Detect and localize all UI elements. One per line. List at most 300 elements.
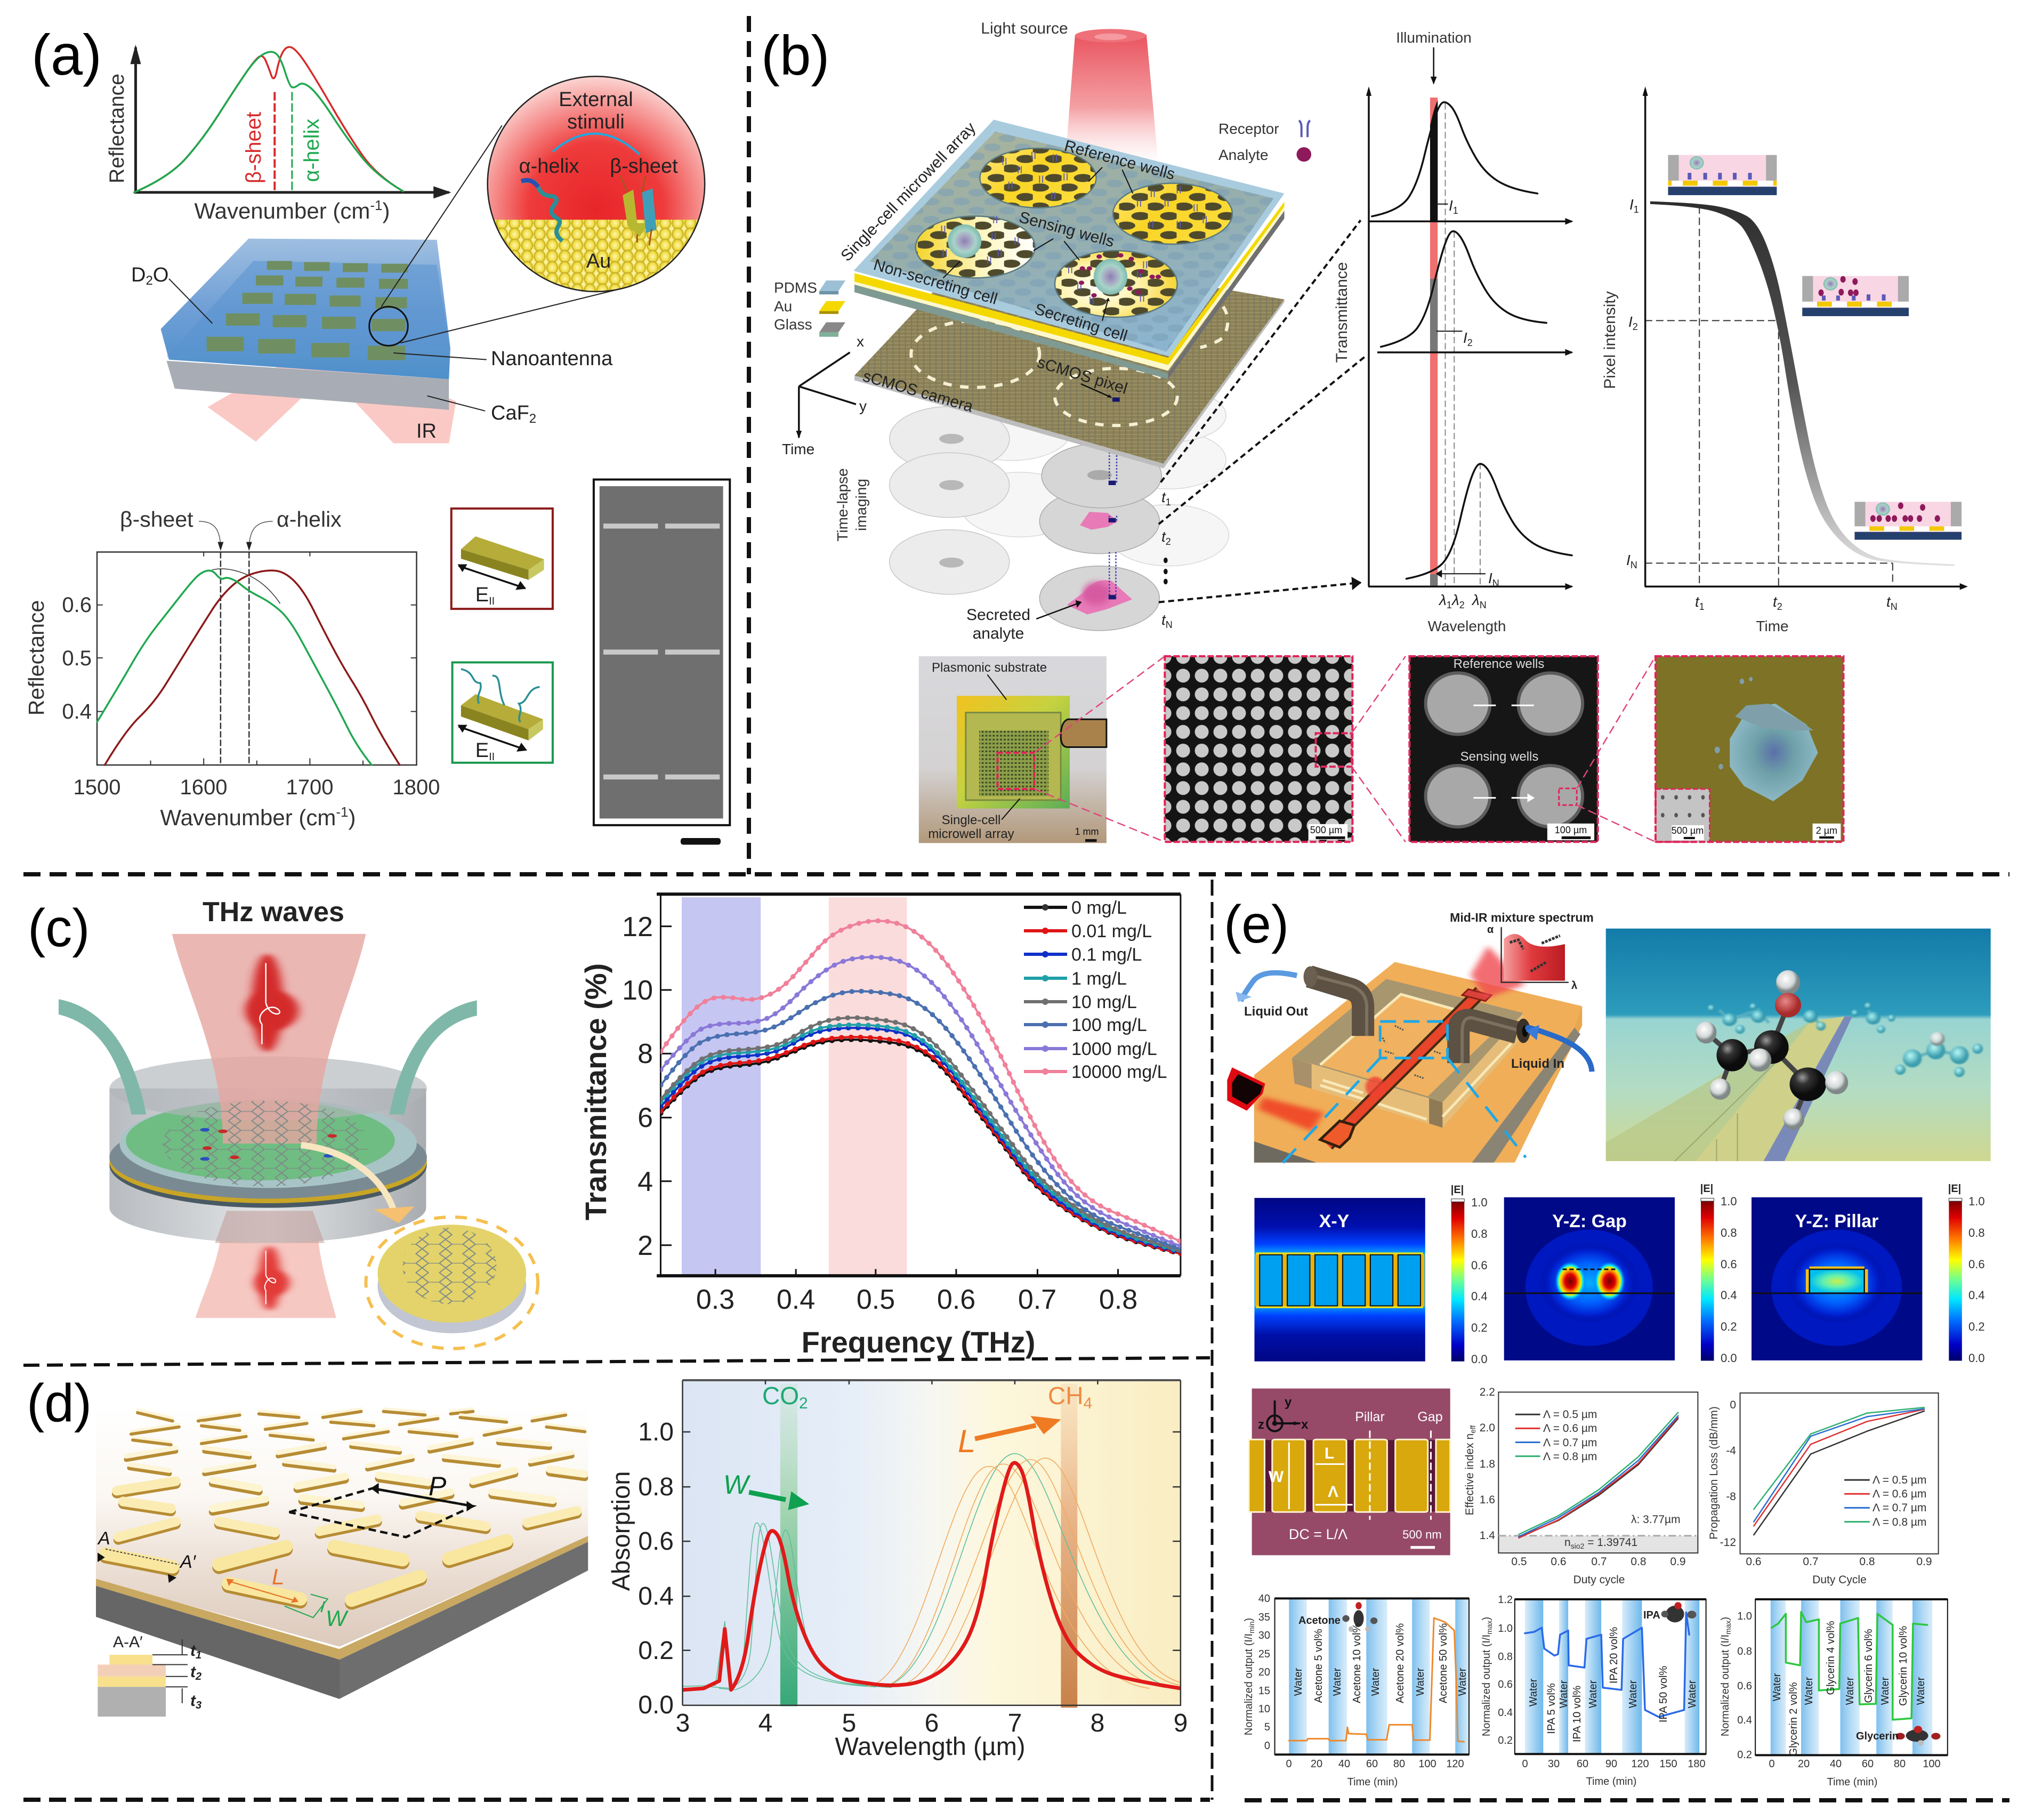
panel letter a: (a)	[31, 22, 102, 87]
micrograph: reference and sensing wells: 100 µm	[1555, 825, 1587, 835]
diagram: microwell array plate: Sensing wells	[1017, 208, 1116, 251]
panel: (b) single-cell plasmonic microwell imaging	[761, 20, 1968, 843]
chart: absorption spectrum	[607, 1380, 1188, 1760]
chart: glycerin response: Glycerin	[1856, 1730, 1899, 1742]
chart: acetone response: min	[1247, 1621, 1256, 1633]
chart: effective index vs duty cycle: 2.2	[1480, 1386, 1495, 1398]
chart: pixel intensity over time	[1601, 86, 1968, 634]
chart: pixel intensity over time: N	[1631, 560, 1637, 570]
icon: nanoantenna device on CaF2: Nanoantenna	[491, 348, 613, 370]
chart: glycerin response: 80	[1894, 1758, 1906, 1770]
diagram: time-lapse disks: N	[1166, 619, 1173, 630]
chart: measured reflectance: α-helix	[277, 507, 342, 531]
panel: (e) mid-IR waveguide sensor	[1224, 895, 1991, 1788]
chart: absorption spectrum: W	[723, 1470, 751, 1500]
chart: pixel intensity over time: 2	[1777, 601, 1782, 612]
legend: concentration series: 0.1 mg/L	[1071, 945, 1142, 965]
chart: effective index vs duty cycle: n	[1564, 1536, 1571, 1549]
chart: absorption spectrum: CH	[1048, 1382, 1083, 1410]
chart: THz transmittance: 0.5	[857, 1284, 895, 1315]
chart: glycerin response: 0.8	[1737, 1646, 1752, 1657]
chart: effective index vs duty cycle: 0.6	[1551, 1556, 1567, 1568]
chart: acetone response: 10	[1258, 1703, 1270, 1715]
chart: absorption spectrum: Wavelength (µm)	[835, 1732, 1026, 1760]
chart: transmittance shift with wavelength: λ	[1452, 592, 1459, 608]
photo: plasmonic substrate: 1 mm	[1075, 826, 1099, 837]
chart: measured reflectance: Wavenumber (cm	[160, 805, 336, 830]
icon: x y time axes	[782, 333, 867, 457]
micrograph: subwavelength grating SEM: DC = L/Λ	[1289, 1526, 1347, 1542]
chart: effective index vs duty cycle: Λ = 0.8 µm	[1543, 1451, 1597, 1463]
chart: acetone response: 120	[1446, 1758, 1464, 1770]
chart: IPA response: Water	[1528, 1678, 1539, 1706]
micrograph: subwavelength grating SEM: Λ	[1328, 1483, 1338, 1501]
chart: absorption spectrum: 8	[1091, 1709, 1104, 1737]
chart: field map X-Y: 0.8	[1471, 1227, 1488, 1241]
panel letter c: (c)	[28, 898, 90, 958]
chart: acetone response: Acetone 5 vol%	[1313, 1629, 1325, 1703]
panel: (c) THz graphene sensor	[28, 894, 1181, 1359]
legend: layers: Au	[774, 298, 792, 315]
chart: measured reflectance: Reflectance	[24, 600, 49, 715]
chart: field map Y-Z gap: 0.8	[1721, 1226, 1737, 1239]
icon: nanoantenna device on CaF2: IR	[416, 420, 437, 442]
chart: IPA response: IPA 5 vol%	[1546, 1683, 1557, 1734]
chart: acetone response	[1243, 1593, 1469, 1788]
chart: absorption spectrum: L	[958, 1423, 975, 1459]
micrograph: single cell on substrate	[1656, 656, 1843, 842]
chart: glycerin response: Water	[1844, 1677, 1856, 1705]
chart: THz transmittance: 2	[637, 1230, 653, 1261]
chart: schematic reflectance spectrum: β-sheet	[242, 112, 265, 183]
chart: pixel intensity over time: 1	[1699, 601, 1705, 612]
chart: pixel intensity over time: I	[1628, 313, 1633, 330]
chart: field map X-Y: 1.0	[1471, 1196, 1488, 1209]
chart: acetone response: 35	[1258, 1612, 1270, 1623]
label: imaging: imaging	[853, 479, 869, 531]
chart: THz transmittance: 0.3	[696, 1284, 735, 1315]
chart: THz transmittance: Frequency (THz)	[802, 1325, 1035, 1359]
chart: THz transmittance: 8	[637, 1038, 653, 1069]
micrograph: single cell on substrate: 2 µm	[1816, 825, 1837, 836]
chart: acetone response: 0	[1286, 1758, 1292, 1770]
chart: glycerin response: 40	[1830, 1758, 1842, 1770]
chart: absorption spectrum: 9	[1174, 1709, 1188, 1737]
chart: measured reflectance: -1	[336, 804, 348, 820]
chart: acetone response: Water	[1331, 1668, 1343, 1696]
chart: absorption spectrum: 3	[676, 1709, 690, 1737]
chart: glycerin response: 0.6	[1737, 1680, 1752, 1692]
chart: IPA response: 1.0	[1498, 1623, 1513, 1634]
chart: measured reflectance: 1700	[286, 776, 333, 799]
callout: external stimuli on gold surface: α-helix	[519, 155, 579, 178]
chart: absorption spectrum: 0.2	[638, 1637, 674, 1665]
label: time-lapse imaging: Time-lapse	[834, 468, 851, 542]
micrograph: subwavelength grating SEM	[1249, 1389, 1450, 1555]
panel letter d: (d)	[27, 1373, 92, 1433]
chart: glycerin response: Glycerin 6 vol%	[1863, 1629, 1875, 1703]
chart: acetone response: Time (min)	[1347, 1776, 1398, 1788]
icon: bare antenna, red frame	[451, 509, 553, 609]
chart: glycerin response: Glycerin 4 vol%	[1825, 1621, 1837, 1695]
diagram: microwell array plate: Reference wells	[1062, 137, 1177, 183]
chart: IPA response: 1.2	[1498, 1594, 1513, 1606]
chart: propagation loss vs duty cycle: Λ = 0.8 µm	[1872, 1516, 1926, 1528]
chart: IPA response: IPA 50 vol%	[1658, 1666, 1669, 1722]
chart: IPA response: 0	[1522, 1758, 1528, 1770]
chart: pixel intensity over time: t	[1886, 593, 1891, 610]
chart: absorption spectrum: 2	[799, 1395, 808, 1412]
legend: concentration series: 1 mg/L	[1071, 969, 1127, 989]
chart: effective index vs duty cycle: 0.7	[1591, 1556, 1607, 1568]
chart: field map Y-Z pillar: 0.6	[1968, 1258, 1985, 1271]
chart: propagation loss vs duty cycle: 0.9	[1916, 1556, 1932, 1568]
chart: THz transmittance: 0.8	[1099, 1284, 1137, 1315]
chart: IPA response: 0.4	[1498, 1707, 1513, 1719]
legend: concentration series: 0 mg/L	[1071, 898, 1127, 918]
chart: effective index vs duty cycle: λ: 3.77µm	[1631, 1513, 1681, 1526]
micrograph: reference and sensing wells: Reference wells	[1454, 657, 1544, 671]
chart: schematic reflectance spectrum: Reflectance	[106, 74, 128, 183]
micrograph: subwavelength grating SEM: z	[1258, 1418, 1264, 1432]
icon: nanoantenna device on CaF2	[131, 125, 623, 443]
chart: transmittance shift with wavelength: 1	[1447, 600, 1452, 610]
chart: acetone response: 80	[1393, 1758, 1405, 1770]
chart: field map X-Y: X-Y	[1319, 1211, 1350, 1231]
chart: field map Y-Z pillar: Y-Z: Pillar	[1795, 1211, 1878, 1231]
chart: effective index vs duty cycle	[1464, 1386, 1698, 1586]
chart: absorption spectrum: 6	[925, 1709, 939, 1737]
chart: acetone response: )	[1243, 1618, 1255, 1621]
chart: propagation loss vs duty cycle: Λ = 0.5 µm	[1872, 1474, 1926, 1486]
panel letter b: (b)	[761, 25, 829, 87]
diagram: nanobar absorber array: t	[190, 1663, 196, 1681]
diagram: microfluidic chip: α	[1487, 924, 1494, 936]
icon: protein functionalised antenna, green frame: E	[475, 739, 489, 762]
legend: receptor and analyte	[1218, 120, 1311, 163]
chart: IPA response: Water	[1627, 1680, 1639, 1708]
chart: pixel intensity over time: I	[1629, 196, 1634, 213]
chart: acetone response: 25	[1258, 1648, 1270, 1660]
chart: transmittance shift with wavelength	[1333, 29, 1573, 634]
micrograph: subwavelength grating SEM: x	[1301, 1418, 1309, 1432]
legend: layers: Glass	[774, 316, 812, 333]
chart: field map X-Y: 0.4	[1471, 1290, 1488, 1303]
icon: x y time axes: Time	[782, 441, 814, 457]
chart: absorption spectrum: 5	[842, 1709, 856, 1737]
diagram: nanobar absorber array: A-A′	[113, 1633, 143, 1651]
chart: IPA response: 120	[1631, 1758, 1649, 1770]
callout: external stimuli on gold surface: stimuli	[567, 111, 625, 133]
chart: transmittance shift with wavelength: 2	[1467, 337, 1473, 348]
chart: propagation loss vs duty cycle: Propagation Loss (dB/mm)	[1708, 1406, 1720, 1540]
legend: concentration series	[1024, 898, 1167, 1082]
diagram: microwell array plate	[837, 119, 1285, 416]
chart: glycerin response: Water	[1879, 1677, 1891, 1705]
chart: schematic reflectance spectrum: α-helix	[300, 119, 324, 182]
chart: glycerin response: Water	[1803, 1677, 1815, 1705]
diagram: nanobar absorber array: L	[272, 1564, 284, 1589]
chart: glycerin response: Time (min)	[1827, 1776, 1877, 1788]
chart: field map X-Y: 0.6	[1471, 1259, 1488, 1272]
chart: acetone response: 40	[1338, 1758, 1350, 1770]
chart: pixel intensity over time: I	[1626, 552, 1631, 568]
chart: THz transmittance: 10	[622, 975, 653, 1006]
panel letter e: (e)	[1224, 895, 1289, 954]
chart: field map Y-Z gap: 0.6	[1721, 1258, 1737, 1271]
diagram: time-lapse disks: 2	[1166, 536, 1171, 547]
chart: schematic reflectance spectrum: Wavenumber (cm	[195, 198, 370, 223]
chart: glycerin response: Water	[1915, 1677, 1927, 1705]
chart: pixel intensity over time: Time	[1756, 618, 1789, 634]
micrograph: subwavelength grating SEM: W	[1269, 1468, 1284, 1486]
legend: receptor and analyte: Analyte	[1218, 147, 1268, 163]
chart: absorption spectrum: 0.0	[638, 1691, 674, 1719]
chart: schematic reflectance spectrum	[106, 45, 451, 223]
micrograph: subwavelength grating SEM: L	[1325, 1445, 1334, 1462]
micrograph: well array	[1165, 656, 1406, 842]
chart: transmittance shift with wavelength: λ	[1439, 592, 1447, 608]
micrograph: subwavelength grating SEM: Pillar	[1355, 1410, 1385, 1424]
chart: IPA response: 180	[1688, 1758, 1706, 1770]
diagram: nanobar absorber array: A′	[179, 1552, 197, 1572]
chart: absorption spectrum: Absorption	[607, 1471, 635, 1591]
chart: field map Y-Z gap: 0.0	[1721, 1351, 1737, 1365]
chart: acetone response: Water	[1415, 1668, 1426, 1696]
callout: external stimuli on gold surface: External	[559, 88, 633, 111]
heading: THz waves: THz waves	[203, 897, 344, 928]
chart: acetone response: 100	[1418, 1758, 1436, 1770]
diagram: nanobar absorber array: P	[429, 1471, 447, 1501]
chart: IPA response: 90	[1605, 1758, 1617, 1770]
chart: IPA response: IPA 20 vol%	[1608, 1627, 1620, 1684]
chart: measured reflectance: )	[348, 805, 356, 830]
chart: THz transmittance	[579, 894, 1181, 1359]
chart: field map Y-Z gap: 0.2	[1721, 1320, 1737, 1333]
micrograph: single cell on substrate: 500 µm	[1672, 825, 1704, 836]
micrograph: subwavelength grating SEM: 500 nm	[1402, 1528, 1442, 1541]
chart: acetone response: 15	[1258, 1685, 1270, 1697]
chart: field map Y-Z pillar: 0.0	[1968, 1351, 1985, 1365]
chart: pixel intensity over time: N	[1891, 601, 1898, 612]
diagram: time-lapse disks: t	[1161, 611, 1166, 628]
chart: effective index vs duty cycle: = 1.39741	[1584, 1536, 1637, 1549]
chart: pixel intensity over time: 1	[1634, 204, 1639, 215]
chart: field map Y-Z pillar: 0.8	[1968, 1226, 1985, 1239]
icon: protein functionalised antenna, green frame: II	[489, 751, 495, 763]
chart: propagation loss vs duty cycle: 0.7	[1803, 1556, 1819, 1568]
diagram: microwell array plate: sCMOS camera	[861, 367, 975, 416]
micrograph: reference and sensing wells	[1409, 656, 1656, 842]
icon: nanoantenna device on CaF2: D	[131, 264, 146, 286]
chart: IPA response: 0.6	[1498, 1679, 1513, 1690]
chart: transmittance shift with wavelength: Transmittance	[1333, 262, 1351, 363]
chart: absorption spectrum: 1.0	[638, 1418, 674, 1446]
chart: IPA response: Normalized output (I/I	[1481, 1634, 1492, 1736]
chart: effective index vs duty cycle: Effective index n	[1464, 1434, 1476, 1516]
chart: acetone response: Acetone 50 vol%	[1438, 1623, 1449, 1703]
legend: concentration series: 0.01 mg/L	[1071, 921, 1152, 941]
diagram: nanobar absorber array: A	[97, 1528, 110, 1549]
chart: glycerin response: Glycerin 2 vol%	[1788, 1682, 1799, 1756]
chart: transmittance shift with wavelength: N	[1480, 600, 1487, 610]
chart: field map Y-Z gap: 0.4	[1721, 1289, 1737, 1302]
chart: glycerin response: 100	[1923, 1758, 1941, 1770]
chart: THz transmittance: 0.7	[1018, 1284, 1056, 1315]
chart: measured reflectance: 1600	[180, 776, 227, 799]
icon: nanoantenna device on CaF2: CaF	[491, 402, 529, 424]
label: secreted analyte: Secreted	[966, 606, 1030, 624]
chart: effective index vs duty cycle: 1.8	[1480, 1458, 1495, 1470]
icon: nanoantenna device on CaF2: 2	[146, 273, 153, 288]
chart: acetone response: Water	[1370, 1668, 1382, 1696]
chart: transmittance shift with wavelength: 1	[1453, 205, 1458, 216]
chart: effective index vs duty cycle: sio2	[1571, 1542, 1585, 1550]
chart: acetone response: Normalized output (I/I	[1243, 1633, 1255, 1735]
diagram: time-lapse disks: t	[1161, 489, 1166, 505]
icon: bare antenna, red frame: II	[489, 595, 495, 607]
chart: propagation loss vs duty cycle: Λ = 0.7 µm	[1872, 1502, 1926, 1514]
diagram: nanobar absorber array: 3	[196, 1700, 201, 1711]
illustration: molecule above waveguide	[1606, 929, 1991, 1161]
icon: protein functionalised antenna, green frame	[453, 663, 553, 763]
chart: effective index vs duty cycle: 0.5	[1511, 1556, 1527, 1568]
diagram: time-lapse disks	[890, 220, 1365, 631]
diagram: microfluidic chip: Liquid In	[1511, 1057, 1564, 1071]
chart: acetone response: 0	[1264, 1740, 1270, 1752]
chart: field map Y-Z pillar	[1752, 1183, 1985, 1365]
chart: propagation loss vs duty cycle: 0.8	[1859, 1556, 1875, 1568]
chart: field map Y-Z pillar: |E|	[1948, 1183, 1961, 1195]
diagram: microwell array plate: sCMOS pixel	[1035, 353, 1129, 398]
chart: effective index vs duty cycle: 1.4	[1480, 1529, 1495, 1542]
chart: pixel intensity over time: t	[1773, 593, 1777, 610]
legend: concentration series: 10 mg/L	[1071, 992, 1137, 1012]
photo: plasmonic substrate: Single-cell	[942, 813, 1000, 827]
diagram: microfluidic chip: λ	[1571, 980, 1577, 992]
chart: glycerin response: max	[1724, 1621, 1732, 1634]
callout: external stimuli on gold surface: Au	[586, 250, 611, 272]
chart: field map Y-Z gap: Y-Z: Gap	[1552, 1211, 1627, 1231]
chart: IPA response: 150	[1659, 1758, 1677, 1770]
chart: acetone response: Acetone 10 vol%	[1351, 1623, 1363, 1703]
chart: transmittance shift with wavelength: 2	[1459, 600, 1465, 610]
icon: x y time axes: y	[859, 398, 867, 414]
chart: measured reflectance: 0.5	[62, 647, 92, 670]
chart: acetone response: Water	[1457, 1668, 1468, 1696]
chart: glycerin response: )	[1720, 1617, 1731, 1621]
label: mid-IR mixture spectrum: Mid-IR mixture spectrum	[1450, 911, 1594, 924]
chart: IPA response: 30	[1548, 1758, 1560, 1770]
chart: THz transmittance: 0.4	[777, 1284, 815, 1315]
diagram: microfluidic chip: Liquid Out	[1244, 1004, 1308, 1019]
chart: glycerin response: Normalized output (I/I	[1720, 1634, 1731, 1736]
chart: schematic reflectance spectrum: )	[382, 198, 390, 223]
diagram: microwell array plate: Secreting cell	[1032, 300, 1129, 345]
chart: IPA response: )	[1481, 1617, 1492, 1621]
chart: measured reflectance: 1500	[74, 776, 120, 799]
chart: field map X-Y: |E|	[1451, 1184, 1464, 1196]
chart: acetone response: 40	[1258, 1593, 1270, 1605]
chart: measured reflectance: 1800	[393, 776, 440, 799]
diagram: nanobar absorber array: t	[190, 1642, 196, 1660]
photo: plasmonic substrate	[919, 656, 1165, 843]
legend: layers: PDMS	[774, 279, 817, 296]
chart: glycerin response: 0	[1769, 1758, 1775, 1770]
micrograph: subwavelength grating SEM: Gap	[1417, 1410, 1443, 1424]
diagram: time-lapse disks: 1	[1166, 497, 1171, 508]
chart: THz transmittance: 0.6	[937, 1284, 975, 1315]
icon: bare antenna, red frame: E	[475, 584, 489, 606]
chart: glycerin response: 20	[1798, 1758, 1810, 1770]
micrograph: reference and sensing wells: Sensing wells	[1460, 750, 1538, 764]
chart: transmittance shift with wavelength: I	[1488, 570, 1492, 586]
chart: measured reflectance	[24, 507, 440, 830]
chart: effective index vs duty cycle: Λ = 0.7 µm	[1543, 1437, 1597, 1449]
chart: effective index vs duty cycle: 1.6	[1480, 1494, 1495, 1506]
label: light source: Light source	[981, 20, 1068, 37]
legend: receptor and analyte: Receptor	[1218, 120, 1279, 137]
chart: propagation loss vs duty cycle: -8	[1726, 1491, 1736, 1503]
chart: effective index vs duty cycle: Λ = 0.6 µm	[1543, 1422, 1597, 1435]
chart: field map Y-Z gap: 1.0	[1721, 1195, 1737, 1208]
photo: plasmonic substrate: Plasmonic substrate	[932, 661, 1047, 675]
diagram: nanobar absorber array: 2	[195, 1671, 201, 1682]
chart: field map X-Y: 0.2	[1471, 1321, 1488, 1334]
chart: glycerin response	[1720, 1599, 1948, 1788]
chart: transmittance shift with wavelength: I	[1449, 197, 1453, 214]
chart: effective index vs duty cycle: 0.9	[1670, 1556, 1686, 1568]
chart: IPA response: Water	[1587, 1680, 1599, 1708]
panel: (d) metamaterial absorber	[27, 1373, 1188, 1760]
chart: IPA response: Water	[1686, 1680, 1698, 1708]
chart: pixel intensity over time: t	[1695, 593, 1699, 610]
chart: acetone response: 20	[1258, 1666, 1270, 1678]
micrograph: subwavelength grating SEM: y	[1285, 1395, 1292, 1410]
chart: absorption spectrum: 4	[758, 1709, 772, 1737]
chart: acetone response: 5	[1264, 1721, 1270, 1733]
chart: measured reflectance: 0.4	[62, 700, 92, 723]
chart: acetone response: Acetone 20 vol%	[1394, 1623, 1406, 1703]
chart: transmittance shift with wavelength: I	[1463, 329, 1467, 346]
chart: propagation loss vs duty cycle: -12	[1720, 1536, 1736, 1549]
chart: absorption spectrum: 0.6	[638, 1527, 674, 1556]
diagram: nanobar absorber array: t	[190, 1692, 196, 1710]
diagram: THz sample cell	[59, 934, 538, 1349]
icon: x y time axes: x	[857, 333, 864, 350]
diagram: microfluidic chip	[1227, 924, 1592, 1163]
chart: acetone response: 20	[1311, 1758, 1322, 1770]
legend: layers	[774, 279, 845, 337]
chart: IPA response: IPA	[1643, 1609, 1660, 1621]
chart: glycerin response: Water	[1771, 1673, 1783, 1701]
micrograph: well array: 500 µm	[1310, 825, 1342, 835]
chart: field map Y-Z pillar: 0.2	[1968, 1320, 1985, 1333]
chart: absorption spectrum: 7	[1008, 1709, 1022, 1737]
legend: concentration series: 100 mg/L	[1071, 1015, 1147, 1035]
chart: propagation loss vs duty cycle: 0.6	[1746, 1556, 1762, 1568]
chart: acetone response: 60	[1366, 1758, 1378, 1770]
chart: propagation loss vs duty cycle: Duty Cycle	[1812, 1574, 1867, 1586]
chart: effective index vs duty cycle: Λ = 0.5 µm	[1543, 1408, 1597, 1421]
chart: transmittance shift with wavelength: Wavelength	[1428, 618, 1506, 634]
diagram: sCMOS camera plane	[854, 247, 1285, 469]
chart: field map Y-Z pillar: 0.4	[1968, 1289, 1985, 1302]
chart: absorption spectrum: 4	[1083, 1395, 1092, 1412]
chart: THz transmittance: 6	[637, 1102, 653, 1133]
chart: propagation loss vs duty cycle: Λ = 0.6 µm	[1872, 1488, 1926, 1500]
photo: plasmonic substrate: microwell array	[928, 827, 1014, 841]
